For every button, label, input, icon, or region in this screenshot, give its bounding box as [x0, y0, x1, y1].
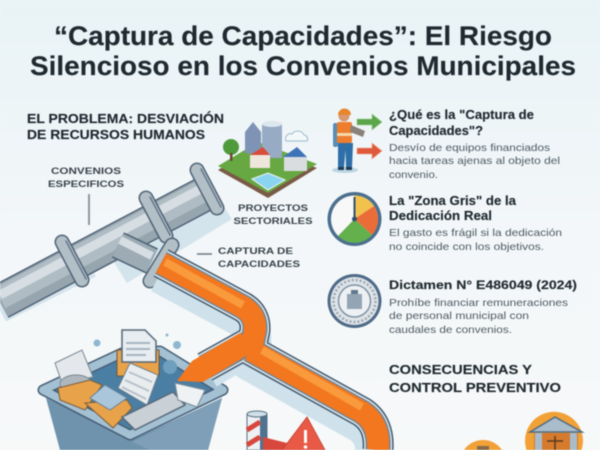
icon: official seal: [328, 274, 382, 328]
title: [30, 21, 576, 81]
text: dictamen: caudales de convenios.: [389, 325, 512, 336]
text: que es la captura: hacia tareas ajenas al objeto del: [389, 156, 560, 167]
droplets: [94, 334, 181, 374]
text: zona gris: [389, 194, 562, 253]
heading: el problema: EL PROBLEMA: DESVIACIÓN: [27, 111, 224, 126]
label: captura de capacidades: CAPTURA DE: [218, 246, 293, 257]
title: Silencioso en los Convenios Municipales: [30, 51, 576, 81]
label: convenios especificos: [48, 166, 124, 225]
icon: warning barrier: [247, 411, 325, 450]
text: que es la captura: [389, 108, 560, 181]
heading: consecuencias: [389, 362, 561, 395]
basket body: [43, 351, 223, 450]
text: que es la captura: convenio.: [389, 170, 438, 181]
arrow green: [357, 114, 382, 130]
text: zona gris: Dedicación Real: [389, 209, 492, 223]
text: dictamen: Dictamen N° E486049 (2024): [389, 278, 577, 292]
icon: city block: [218, 121, 317, 198]
folders: [55, 350, 132, 428]
label: proyectos sectoriales: PROYECTOS: [238, 203, 308, 214]
title: “Captura de Capacidades”: El Riesgo: [54, 21, 552, 51]
icon: worker with arrows: [332, 109, 382, 173]
heading: consecuencias: CONTROL PREVENTIVO: [389, 380, 561, 395]
pipe flanges: [62, 169, 221, 281]
text: que es la captura: Capacidades"?: [389, 124, 483, 138]
text: zona gris: no coincide con los objetivos.: [389, 242, 544, 253]
heading: el problema: [27, 111, 224, 142]
grey pipe network: [0, 169, 225, 310]
heading: consecuencias: CONSECUENCIAS Y: [389, 362, 532, 377]
orange diverted pipe: [159, 262, 378, 450]
label: proyectos sectoriales: [234, 203, 312, 227]
icon: orange badge: [464, 440, 502, 450]
document in folder: [117, 330, 159, 376]
heading: el problema: DE RECURSOS HUMANOS: [27, 127, 205, 142]
text: dictamen: Prohíbe financiar remuneraciones: [389, 298, 568, 309]
label: captura de capacidades: CAPACIDADES: [218, 259, 300, 270]
label: proyectos sectoriales: SECTORIALES: [234, 216, 312, 227]
text: zona gris: La "Zona Gris" de la: [389, 194, 517, 208]
text: que es la captura: Desvío de equipos financiados: [389, 143, 550, 154]
arrow red: [357, 143, 382, 159]
text: dictamen: [389, 278, 577, 336]
icon: courthouse badge: [525, 412, 583, 450]
icon: basket contents: [55, 330, 205, 430]
text: zona gris: El gasto es frágil si la dedicación: [389, 228, 562, 239]
label: convenios especificos: CONVENIOS: [51, 166, 121, 177]
label: captura de capacidades: [197, 246, 300, 270]
text: que es la captura: ¿Qué es la "Captura de: [389, 108, 534, 122]
papers and keyboard: [118, 363, 205, 430]
icon: clock pie: [328, 192, 382, 246]
label: convenios especificos: ESPECIFICOS: [48, 179, 124, 190]
text: dictamen: de personal municipal con: [389, 311, 529, 322]
